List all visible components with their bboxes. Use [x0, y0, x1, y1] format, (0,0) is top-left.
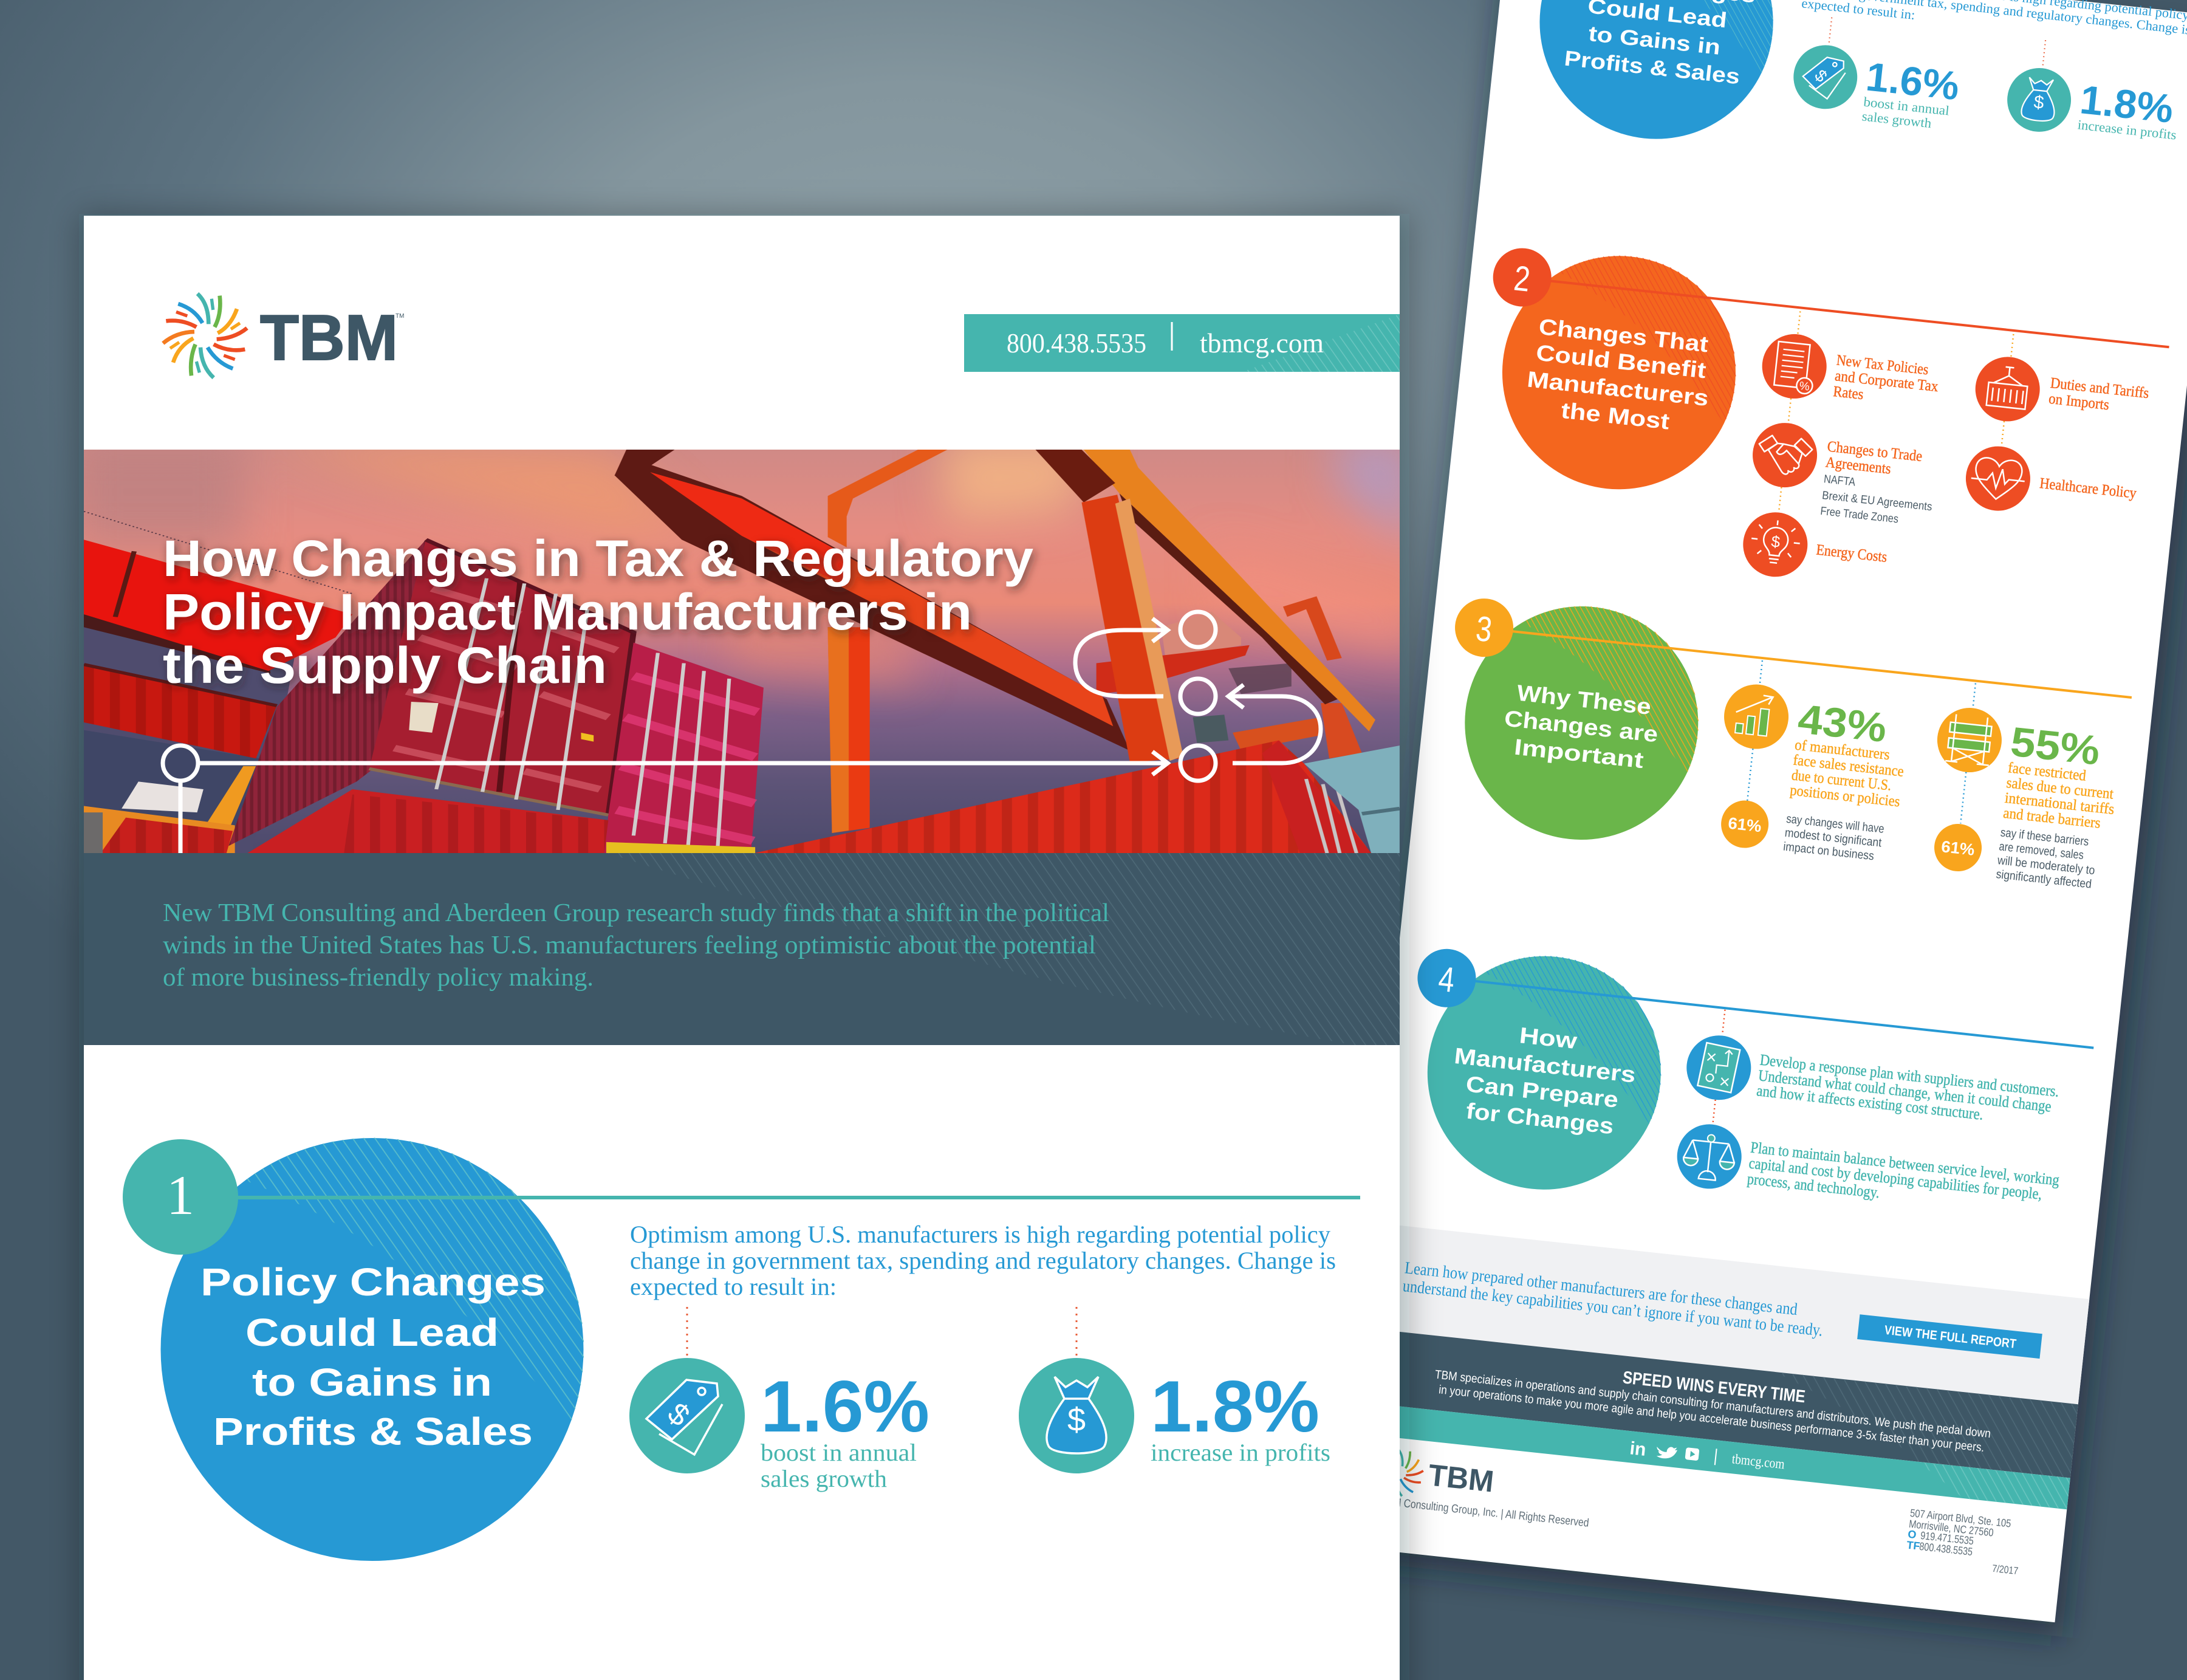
speed wins dark band	[1350, 1328, 2078, 1478]
stat: 1.8 percent: 1.8%	[2078, 77, 2175, 132]
section 1 heading	[1556, 0, 1757, 89]
section 2 rule	[1549, 281, 2169, 347]
hero title	[163, 530, 1033, 694]
hero title: Policy Impact Manufacturers in	[163, 583, 972, 640]
stat: 43 percent: due to current U.S.	[1791, 767, 1892, 794]
text: duties and tariffs	[2048, 375, 2150, 417]
right red container	[755, 741, 1371, 853]
website: tbmcg.com	[1731, 1451, 1785, 1472]
call to action text: Learn how prepared other manufacturers are for these changes and	[1404, 1258, 1798, 1319]
section 4 heading: for Changes	[1465, 1099, 1615, 1139]
stat: 55 percent: 55%	[2008, 719, 2102, 774]
section 1 rule	[238, 1196, 1360, 1199]
stat: 1.6 percent: sales growth	[1861, 108, 1932, 131]
stat: 1.6 percent: boost in annual	[1863, 94, 1950, 118]
text: maintain balance: capital and cost by developing capabilities for people,	[1748, 1154, 2043, 1203]
stat: 1.8 percent: $	[2033, 92, 2045, 113]
icon: light bulb: $	[1770, 532, 1781, 551]
badge: 61 percent right	[1932, 821, 1984, 874]
section 1 number badge: 1	[166, 1164, 194, 1226]
section 4 rule	[1474, 981, 2093, 1048]
section 1 circle	[1528, 0, 1785, 151]
back section 2: changes that could benefit	[1465, 242, 2172, 616]
stat: 1.6 percent	[629, 1307, 929, 1492]
icon: linkedin: in	[1629, 1438, 1647, 1460]
container doors	[369, 540, 634, 815]
text: 61 percent right: say if these barriers	[2000, 826, 2089, 849]
far gantry	[1283, 596, 1342, 660]
icon: twitter	[1656, 1445, 1677, 1459]
logo wordmark: TM	[395, 313, 404, 320]
text: healthcare policy: Healthcare Policy	[2039, 475, 2137, 502]
text: 61 percent left: say changes will have	[1785, 812, 1885, 836]
intro text	[163, 899, 1109, 992]
section 2 heading: Manufacturers	[1526, 366, 1710, 411]
intro text: of more business-friendly policy making.	[163, 964, 594, 992]
speed wins heading: SPEED WINS EVERY TIME	[1622, 1368, 1806, 1407]
corrugated container side	[228, 540, 426, 846]
stat: 43 percent: of manufacturers	[1794, 737, 1891, 763]
date stamp: 7/2017	[1991, 1563, 2019, 1577]
sky streaks	[73, 437, 1415, 681]
address block: 507 Airport Blvd, Ste. 105	[1909, 1507, 2011, 1530]
section 4 circle	[1415, 944, 1673, 1201]
section 2 heading	[1523, 314, 1716, 438]
icon: handshake	[1750, 420, 1820, 490]
stat: 55 percent: sales due to current	[2005, 775, 2114, 803]
hero title: How Changes in Tax & Regulatory	[163, 530, 1033, 587]
front page shadow	[79, 214, 1409, 1680]
icon: strategy plan board	[1683, 1032, 1754, 1103]
lower container	[247, 789, 608, 853]
text: maintain balance: process, and technology.	[1747, 1170, 1880, 1201]
icon: heart pulse	[1963, 443, 2033, 514]
section 3 number badge: 3	[1474, 609, 1494, 650]
text: trade agreements: Free Trade Zones	[1819, 505, 1899, 526]
stat: 55 percent: face restricted	[2007, 759, 2087, 784]
text: response plan	[1756, 1051, 2060, 1131]
icon: money bag	[1047, 1377, 1106, 1453]
stat: 1.8 percent	[1019, 1307, 1330, 1473]
address block: 800.438.5535	[1918, 1540, 1973, 1558]
section 1 heading: to Gains in	[1587, 22, 1722, 60]
stat: 1.6 percent: 1.6%	[761, 1366, 929, 1447]
icon: tax document: %	[1799, 380, 1810, 394]
section 3 rule	[1512, 631, 2132, 698]
section 1 heading: Profits & Sales	[213, 1410, 533, 1453]
section 2 number badge	[1490, 245, 1555, 309]
dotted connectors	[1713, 1010, 1725, 1125]
section 3 heading: Important	[1513, 735, 1645, 773]
icon: shipping container	[1972, 354, 2043, 425]
website: tbmcg.com	[1200, 327, 1324, 358]
section 1 heading	[200, 1260, 546, 1453]
section 1 intro text: Optimism among U.S. manufacturers is high regarding potential policy	[630, 1221, 1330, 1248]
front page sheet	[84, 216, 1400, 1680]
section 1 intro text: change in government tax, spending and regulatory changes. Change is	[630, 1247, 1336, 1274]
stat: 55 percent	[2002, 719, 2123, 833]
copyright line: TBM Consulting Group, Inc. | All Rights Reserved	[1380, 1495, 1590, 1530]
badge: 61 percent left: 61%	[1727, 814, 1762, 835]
call to action text: understand the key capabilities you can’t ignore if you want to be ready.	[1402, 1277, 1824, 1340]
text: trade agreements	[1819, 439, 1938, 529]
text: tax policies	[1832, 352, 1941, 411]
door bars	[436, 578, 729, 851]
section 4 heading	[1447, 1016, 1640, 1140]
back section 1: policy changes	[1528, 0, 2187, 195]
stat: 43 percent	[1789, 696, 1911, 810]
stat: 43 percent: face sales resistance	[1792, 752, 1905, 780]
contact bar	[964, 314, 1400, 372]
address block: Morrisville, NC 27560	[1908, 1518, 1994, 1539]
hero photo: cranes and containers	[73, 437, 1415, 853]
text: maintain balance: Plan to maintain balance between service level, working	[1750, 1139, 2060, 1189]
text: 61 percent right	[1995, 826, 2098, 891]
section 3 heading: Why These	[1516, 681, 1652, 719]
icon: tax document	[1759, 331, 1830, 402]
stat: 1.6 percent: sales growth	[761, 1465, 887, 1492]
phone number: 800.438.5535	[1007, 327, 1146, 358]
stat: 1.6 percent: $	[662, 1396, 696, 1433]
back section 4: how manufacturers can prepare	[1397, 942, 2097, 1247]
main leg	[1035, 450, 1115, 502]
section 2 heading: Could Benefit	[1535, 340, 1707, 383]
thin leg	[828, 450, 947, 547]
intro band	[84, 853, 1400, 1045]
process arrows overlay	[163, 612, 1321, 853]
address block: TF	[1906, 1539, 1921, 1552]
icon: price tag	[646, 1380, 722, 1455]
icon: light bulb	[1740, 509, 1811, 580]
text: duties and tariffs: Duties and Tariffs	[2050, 375, 2150, 402]
hero title: the Supply Chain	[163, 637, 607, 694]
badge: 61 percent right: 61%	[1940, 837, 1976, 859]
section 2 circle	[1491, 244, 1748, 501]
section 3 number badge	[1452, 595, 1516, 660]
front page	[73, 216, 1415, 1680]
header logo	[163, 293, 404, 378]
section 1 heading: Profits & Sales	[1563, 47, 1741, 89]
text: 61 percent right: are removed, sales	[1998, 840, 2084, 862]
intro text: New TBM Consulting and Aberdeen Group research study finds that a shift in the political	[163, 899, 1109, 927]
door labels	[409, 702, 439, 733]
stat: 1.6 percent: 1.6%	[1864, 55, 1962, 109]
stat: 43 percent: positions or policies	[1789, 782, 1901, 810]
text: maintain balance	[1747, 1139, 2060, 1220]
stat: 1.8 percent: increase in profits	[2077, 117, 2177, 143]
text: tax policies: and Corporate Tax	[1834, 368, 1939, 395]
call to action band	[1358, 1222, 2089, 1404]
left half structures	[84, 512, 764, 853]
lower red girder	[84, 665, 277, 758]
stat: 1.8 percent: increase in profits	[1151, 1439, 1330, 1466]
right blue containers	[1304, 746, 1400, 853]
crane cabin and machinery	[1162, 612, 1241, 659]
speed wins description: TBM specializes in operations and supply chain consulting for manufacturers and distributors. We push the pedal down	[1434, 1368, 1991, 1441]
intro text: winds in the United States has U.S. manufacturers feeling optimistic about the potential	[163, 931, 1096, 959]
stat: 43 percent: 43%	[1796, 696, 1889, 751]
right half structures	[615, 450, 1400, 853]
text: trade agreements: Changes to Trade	[1827, 439, 1923, 465]
stat: 1.8 percent: $	[1067, 1402, 1086, 1438]
divider	[1715, 1449, 1717, 1465]
stat: 1.6 percent: $	[1811, 66, 1831, 86]
stat: 1.8 percent	[2004, 37, 2185, 146]
icon: youtube	[1685, 1447, 1699, 1461]
section 4 heading: How	[1518, 1023, 1578, 1054]
stat: 55 percent: and trade barriers	[2002, 805, 2101, 832]
text: 61 percent left: modest to significant	[1784, 826, 1883, 850]
section 1 intro text: expected to result in:	[630, 1273, 837, 1300]
stat: 1.6 percent	[1789, 14, 1965, 133]
text: tax policies: Rates	[1832, 383, 1864, 403]
logo starburst	[163, 293, 247, 378]
logo wordmark: TBM	[260, 302, 398, 374]
section 1 heading: to Gains in	[252, 1360, 492, 1404]
icon: rising bar chart	[1721, 681, 1792, 752]
dotted connectors	[1747, 660, 1976, 823]
section 1 circle	[160, 1138, 584, 1561]
text: 61 percent left	[1782, 812, 1885, 864]
main diagonal beam	[615, 450, 1130, 750]
left machinery	[205, 766, 256, 831]
section 3 heading: Changes are	[1503, 706, 1659, 747]
text: response plan: and how it affects existing cost structure.	[1756, 1082, 1984, 1123]
section 2 number badge: 2	[1512, 258, 1532, 300]
back section 3: why these changes	[1434, 592, 2135, 897]
dotted connectors	[1779, 311, 2013, 535]
section 3 circle	[1453, 594, 1710, 851]
section 2 heading: the Most	[1560, 398, 1671, 434]
back page sheet	[1335, 0, 2187, 1622]
second container	[604, 643, 764, 853]
stat: 55 percent: international tariffs	[2004, 790, 2115, 818]
address block: 919.471.5535	[1920, 1529, 1974, 1547]
section 1 heading: Could Lead	[245, 1311, 499, 1354]
back logo	[1393, 1449, 1496, 1506]
button: view the full report: VIEW THE FULL REPORT	[1884, 1323, 2017, 1351]
section 1 intro text	[630, 1221, 1336, 1300]
speed wins description: in your operations to make you more agile and help you accelerate business performance 3-5x faster than your peers.	[1438, 1383, 1985, 1455]
upper right beam	[1120, 493, 1338, 704]
section 1 heading: Policy Changes	[200, 1260, 546, 1304]
icon: balance scales	[1674, 1121, 1745, 1192]
icon: road barrier	[1934, 705, 2005, 775]
address block: O	[1907, 1528, 1917, 1541]
section 3 heading	[1500, 679, 1662, 774]
badge: 61 percent left	[1719, 798, 1771, 850]
text: response plan: Understand what could change, when it could change	[1757, 1066, 2052, 1116]
social teal band	[1347, 1401, 2070, 1509]
section 4 heading: Can Prepare	[1465, 1071, 1620, 1113]
section 1: policy changes	[123, 1138, 1360, 1561]
text: 61 percent right: significantly affected	[1996, 868, 2092, 891]
back logo: TBM	[1426, 1458, 1496, 1499]
upper red girder	[84, 614, 270, 673]
text: response plan: Develop a response plan with suppliers and customers.	[1759, 1051, 2060, 1100]
button: view the full report	[1857, 1314, 2042, 1359]
text: tax policies: New Tax Policies	[1836, 352, 1929, 378]
text: trade agreements: NAFTA	[1823, 473, 1856, 489]
text: energy costs: Energy Costs	[1815, 542, 1888, 566]
section 4 heading: Manufacturers	[1453, 1043, 1637, 1088]
stat: 1.8 percent: 1.8%	[1151, 1366, 1319, 1447]
text: trade agreements: Agreements	[1825, 454, 1892, 478]
section 4 number badge: 4	[1437, 959, 1457, 1000]
text: trade agreements: Brexit & EU Agreements	[1821, 489, 1932, 513]
dark sky behind girders	[84, 617, 302, 853]
text: duties and tariffs: on Imports	[2048, 391, 2110, 413]
section 2 heading: Changes That	[1538, 314, 1710, 357]
section 1 intro text	[1801, 0, 2187, 52]
back page: rotated full infographic	[1333, 0, 2187, 1637]
address block	[1906, 1507, 2011, 1562]
text: 61 percent right: will be moderately to	[1996, 854, 2095, 877]
section 4 number badge	[1415, 946, 1479, 1010]
stat: 1.6 percent: boost in annual	[761, 1439, 917, 1466]
back page shadow	[1337, 0, 2187, 1637]
section 1 number badge	[123, 1139, 238, 1255]
text: 61 percent left: impact on business	[1782, 840, 1875, 863]
